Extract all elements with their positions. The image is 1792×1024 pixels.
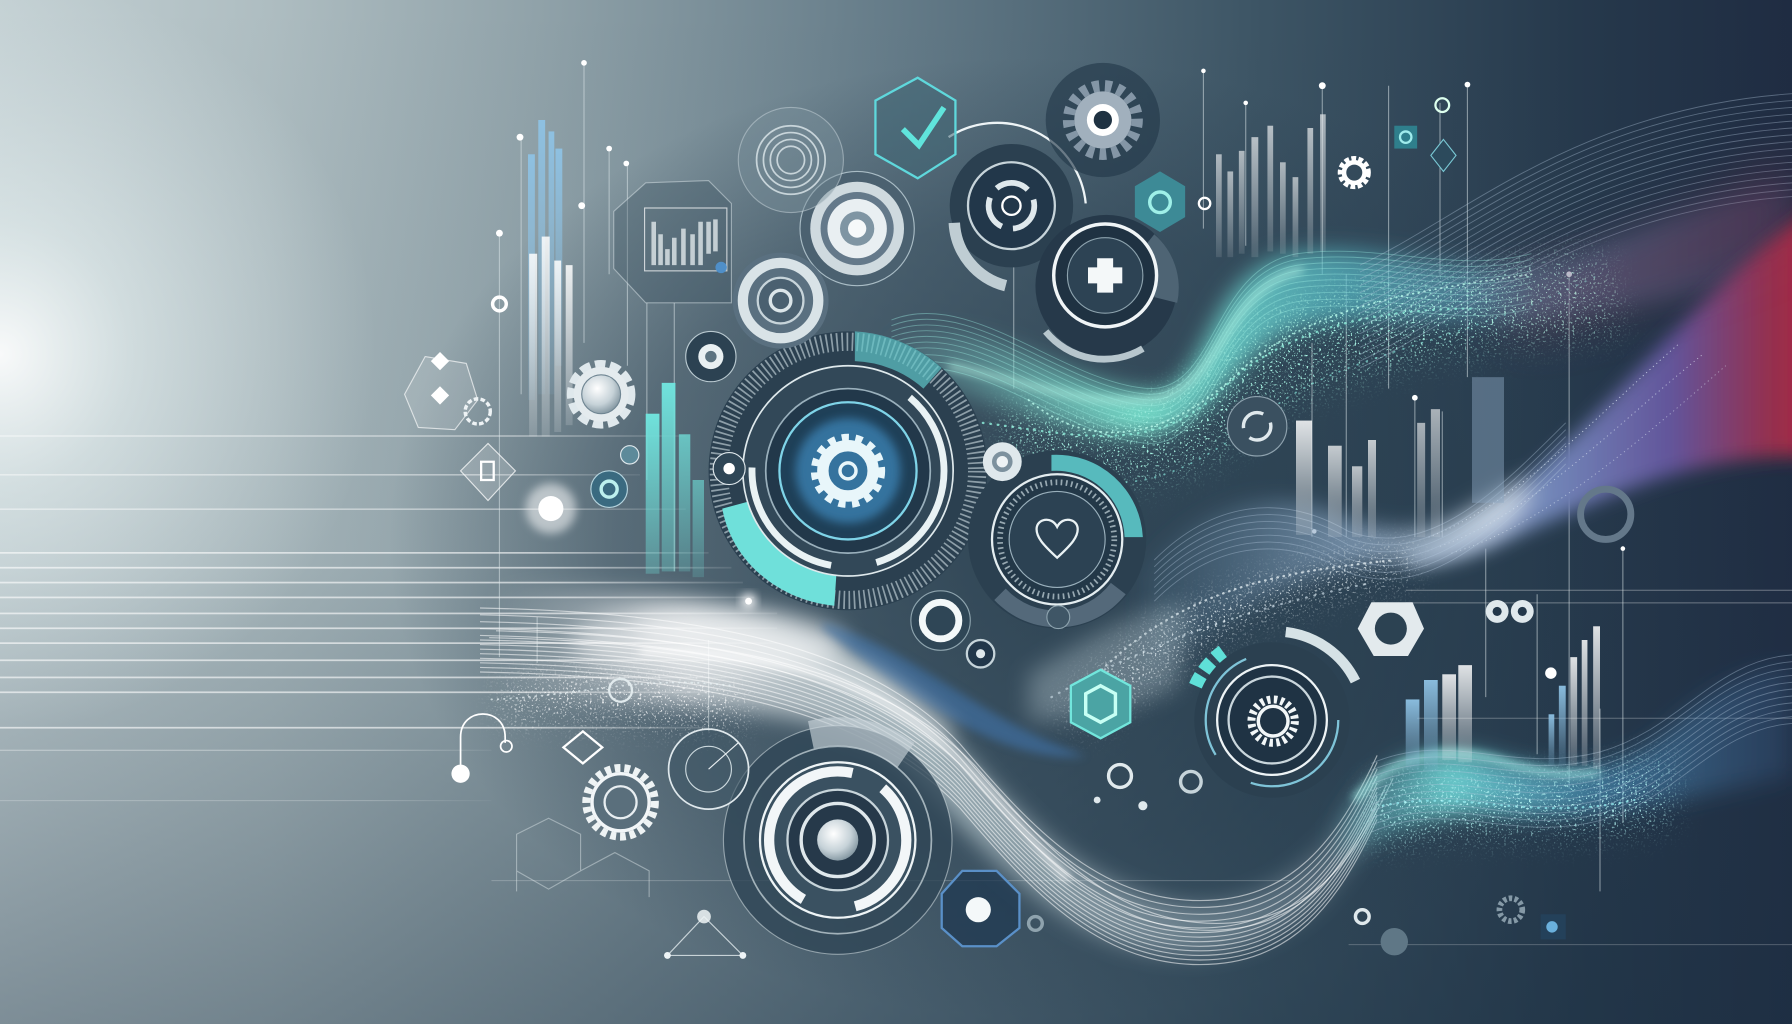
top gear — [1046, 63, 1160, 177]
gear bottom left — [586, 768, 655, 837]
silver ring dial left — [733, 253, 829, 349]
heart dial — [968, 450, 1146, 629]
bar chart: lower right bars — [1406, 626, 1600, 771]
bottom left large dial — [723, 717, 952, 954]
chart panel with small bars — [614, 181, 731, 303]
dark arc dial — [949, 123, 1086, 286]
teal wave — [891, 183, 1792, 485]
lower teal wave — [1337, 655, 1792, 863]
small ring icons — [591, 126, 1631, 955]
medical cross dial — [1035, 215, 1179, 359]
icon: check shield hexagon — [875, 78, 955, 178]
top right fine wave lines — [1360, 94, 1792, 368]
bottom right gear dial — [1194, 632, 1355, 798]
silver gear left — [571, 365, 631, 424]
horizontal light lines at left — [0, 435, 1792, 945]
blue grey central wave — [1029, 423, 1566, 731]
bar chart: top right grey bars — [1216, 114, 1326, 257]
bar chart: teal bars — [646, 383, 704, 577]
icon: teal hexagon — [1135, 171, 1185, 232]
silver ring dial top — [800, 171, 914, 286]
white flowing band — [480, 589, 1393, 965]
thin ring dial bottom left — [669, 729, 749, 809]
main gear dial — [709, 331, 987, 610]
faint concentric dial — [738, 107, 843, 213]
icon: octagon node — [942, 871, 1019, 946]
bar chart: center right grey bars — [1296, 377, 1504, 537]
hexagon network bottom left — [517, 818, 746, 959]
diamond icon — [461, 443, 515, 501]
vertical thin lines with node dots — [496, 60, 1625, 891]
left hexagon cluster — [405, 352, 490, 430]
glowing nodes — [493, 297, 757, 609]
icon: glowing lower hexagon — [1071, 670, 1130, 738]
red and purple wave — [1406, 149, 1792, 566]
connector arc with dot — [451, 714, 602, 783]
hex nut right — [1358, 602, 1424, 656]
bar chart: upper left blue and white bars — [528, 120, 573, 437]
